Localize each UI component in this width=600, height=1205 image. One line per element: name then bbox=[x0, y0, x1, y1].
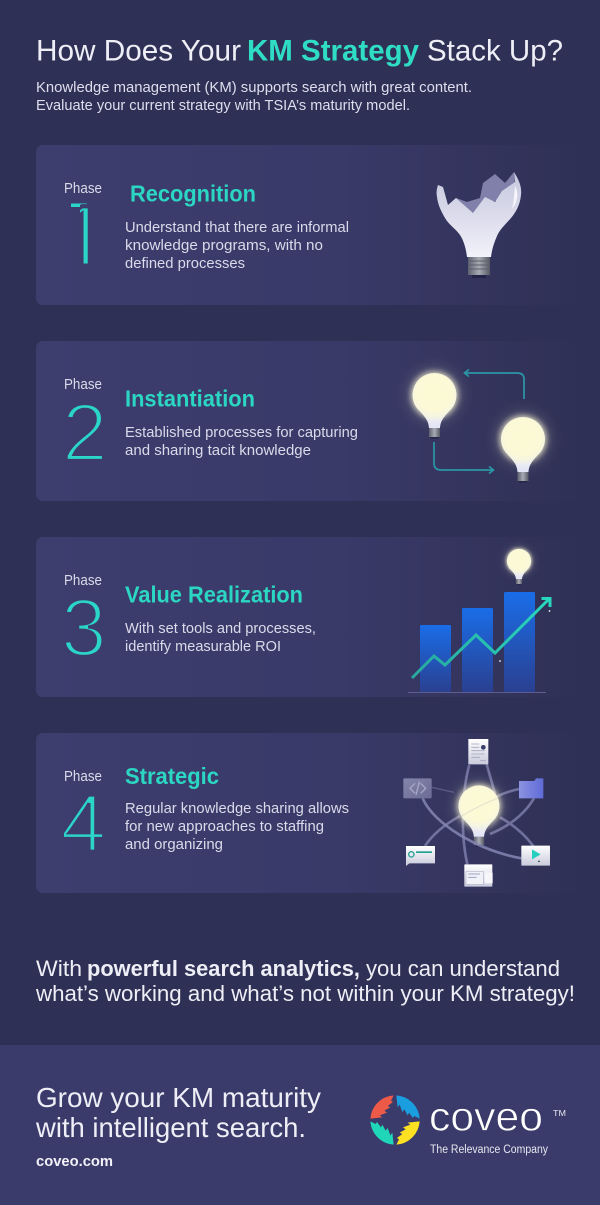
intro text: Knowledge management (KM) supports search with great content. bbox=[36, 79, 472, 96]
intro text: Evaluate your current strategy with TSIA’s maturity model. bbox=[36, 97, 410, 114]
arrow bottom bbox=[434, 442, 494, 474]
heading: Strategic bbox=[125, 763, 219, 789]
title: How Does Your bbox=[36, 34, 241, 68]
closing statement: powerful search analytics, bbox=[87, 956, 360, 981]
closing statement: what’s working and what’s not within your KM strategy! bbox=[35, 981, 575, 1006]
heading: Instantiation bbox=[125, 386, 255, 412]
trademark: TM bbox=[553, 1109, 566, 1118]
folder card bbox=[519, 778, 543, 798]
bulb left bbox=[408, 368, 462, 439]
website: coveo.com bbox=[36, 1154, 113, 1170]
panel: phase 4 strategic bbox=[36, 733, 576, 893]
phase label 1: Phase bbox=[64, 181, 102, 197]
description: and sharing tacit knowledge bbox=[125, 443, 311, 459]
browser card bbox=[464, 864, 493, 887]
call to action bbox=[35, 1082, 321, 1143]
description: With set tools and processes, bbox=[125, 621, 316, 637]
description bbox=[125, 621, 316, 655]
phase label 4: Phase bbox=[64, 769, 102, 785]
numeral 3: 3 bbox=[61, 582, 107, 674]
numeral 1 bbox=[71, 204, 88, 264]
central bulb bbox=[454, 781, 504, 847]
phase label 2: Phase bbox=[64, 377, 102, 393]
orbit lines bbox=[425, 764, 534, 864]
closing statement bbox=[35, 956, 575, 1006]
phase label 3: Phase bbox=[64, 573, 102, 589]
chat card bbox=[406, 846, 435, 866]
trend arrow bbox=[412, 598, 550, 678]
title bbox=[36, 34, 563, 68]
bars bbox=[420, 592, 535, 692]
icon: bulb connected to content types bbox=[403, 739, 550, 887]
description: Understand that there are informal bbox=[125, 220, 349, 236]
title: KM Strategy bbox=[247, 34, 419, 68]
bulb on top bbox=[504, 546, 534, 585]
panel: phase 3 value realization bbox=[36, 537, 576, 697]
description: knowledge programs, with no bbox=[125, 238, 323, 254]
code card bbox=[403, 778, 432, 798]
description: for new approaches to staffing bbox=[125, 819, 324, 835]
numeral 4: 4 bbox=[60, 778, 106, 869]
coveo logo bbox=[370, 1094, 566, 1156]
logo wordmark: coveo bbox=[429, 1094, 543, 1140]
description bbox=[125, 801, 349, 853]
icon: broken light bulb bbox=[437, 172, 521, 278]
closing statement: you can understand bbox=[366, 956, 560, 981]
call to action: Grow your KM maturity bbox=[36, 1082, 321, 1113]
title: Stack Up? bbox=[427, 34, 563, 68]
document card bbox=[468, 739, 488, 764]
heading: Recognition bbox=[130, 180, 256, 206]
numeral 1: 1 bbox=[57, 186, 111, 293]
heading: Value Realization bbox=[125, 582, 303, 608]
call to action: with intelligent search. bbox=[35, 1112, 306, 1143]
description bbox=[125, 425, 358, 459]
description: and organizing bbox=[125, 837, 223, 853]
arrow top bbox=[464, 370, 524, 399]
description: Regular knowledge sharing allows bbox=[125, 801, 349, 817]
front orbit line bbox=[423, 798, 521, 858]
icon: two bulbs exchanging bbox=[408, 368, 550, 483]
footer band bbox=[0, 1045, 600, 1205]
bulb right bbox=[496, 412, 550, 483]
tagline: The Relevance Company bbox=[430, 1144, 548, 1156]
numeral 2: 2 bbox=[62, 388, 108, 478]
description bbox=[125, 220, 349, 272]
icon: bar chart with bulb bbox=[408, 546, 550, 693]
panel: phase 1 recognition bbox=[36, 145, 522, 305]
video card bbox=[521, 846, 550, 866]
closing statement: With bbox=[36, 956, 82, 981]
description: defined processes bbox=[125, 256, 245, 272]
description: Established processes for capturing bbox=[125, 425, 358, 441]
logo mark bbox=[370, 1095, 420, 1145]
intro text bbox=[36, 79, 472, 114]
panel: phase 2 instantiation bbox=[36, 341, 576, 501]
description: identify measurable ROI bbox=[125, 639, 281, 655]
